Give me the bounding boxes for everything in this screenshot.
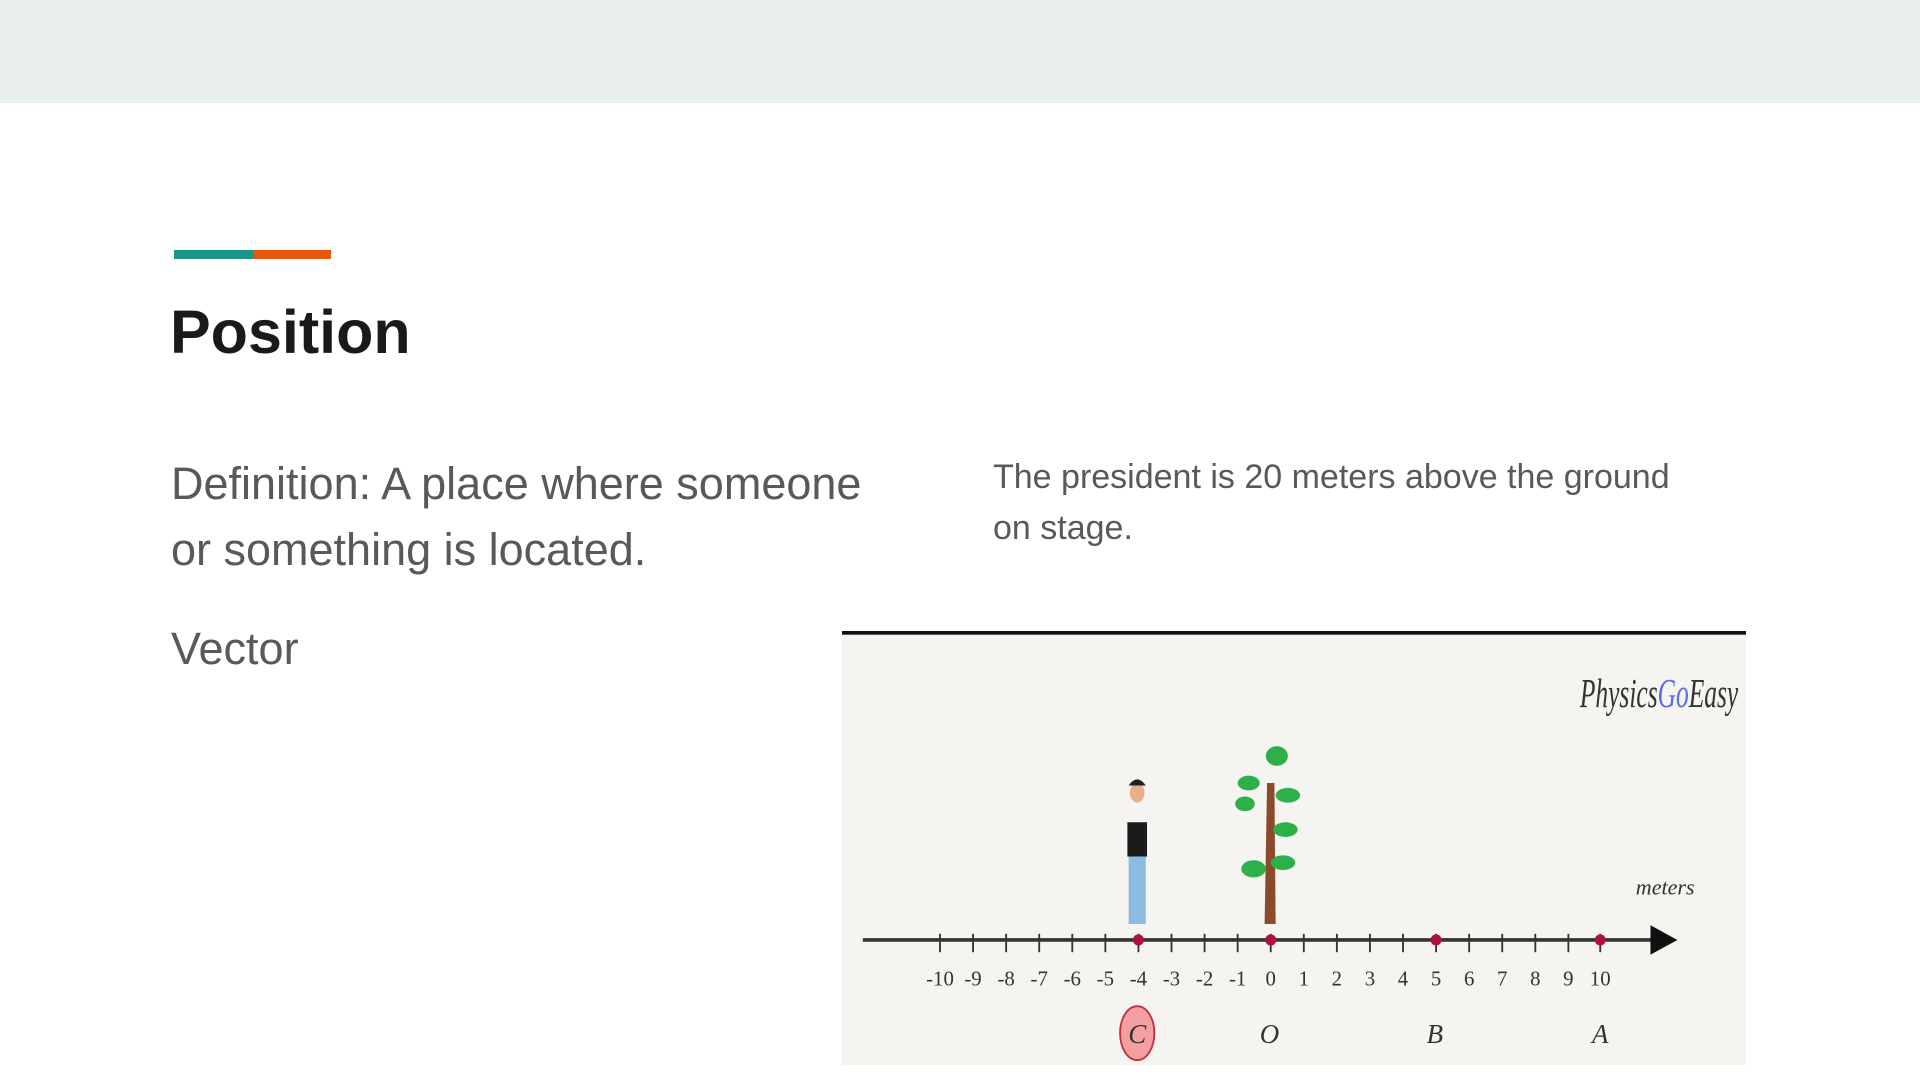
point letters: [1120, 1006, 1609, 1060]
accent bar: [174, 250, 331, 259]
axis: -7: [1031, 966, 1048, 990]
axis: -4: [1130, 966, 1148, 990]
axis: 6: [1464, 966, 1474, 990]
axis: -3: [1163, 966, 1180, 990]
axis: 7: [1497, 966, 1507, 990]
meters label: meters: [1636, 875, 1695, 900]
person: [1127, 779, 1147, 924]
axis: -5: [1097, 966, 1114, 990]
axis: [863, 925, 1677, 990]
point letters: B: [1427, 1019, 1443, 1049]
axis: 4: [1398, 966, 1409, 990]
axis: 1: [1299, 966, 1309, 990]
axis: -2: [1196, 966, 1213, 990]
title: Position: [170, 298, 411, 366]
header band: [0, 0, 1920, 103]
axis: 0: [1266, 966, 1276, 990]
axis: 10: [1590, 966, 1611, 990]
point letters: C: [1128, 1019, 1147, 1049]
vector text: Vector: [171, 623, 299, 674]
point letters: O: [1260, 1019, 1279, 1049]
president text: The president is 20 meters above the ground on stage.: [993, 458, 1670, 547]
logo: PhysicsGoEasy: [1579, 671, 1739, 717]
axis: 3: [1365, 966, 1375, 990]
axis: -9: [964, 966, 982, 990]
number line image: [842, 631, 1746, 1065]
axis: -10: [926, 966, 954, 990]
axis: 9: [1563, 966, 1574, 990]
axis: -8: [997, 966, 1015, 990]
point letters: A: [1590, 1019, 1609, 1049]
tree: [1235, 746, 1300, 924]
axis: -1: [1229, 966, 1246, 990]
axis: 5: [1431, 966, 1441, 990]
definition text: Definition: A place where someone or something is located.: [171, 458, 861, 575]
axis: 2: [1332, 966, 1342, 990]
axis: -6: [1064, 966, 1081, 990]
axis: 8: [1530, 966, 1541, 990]
